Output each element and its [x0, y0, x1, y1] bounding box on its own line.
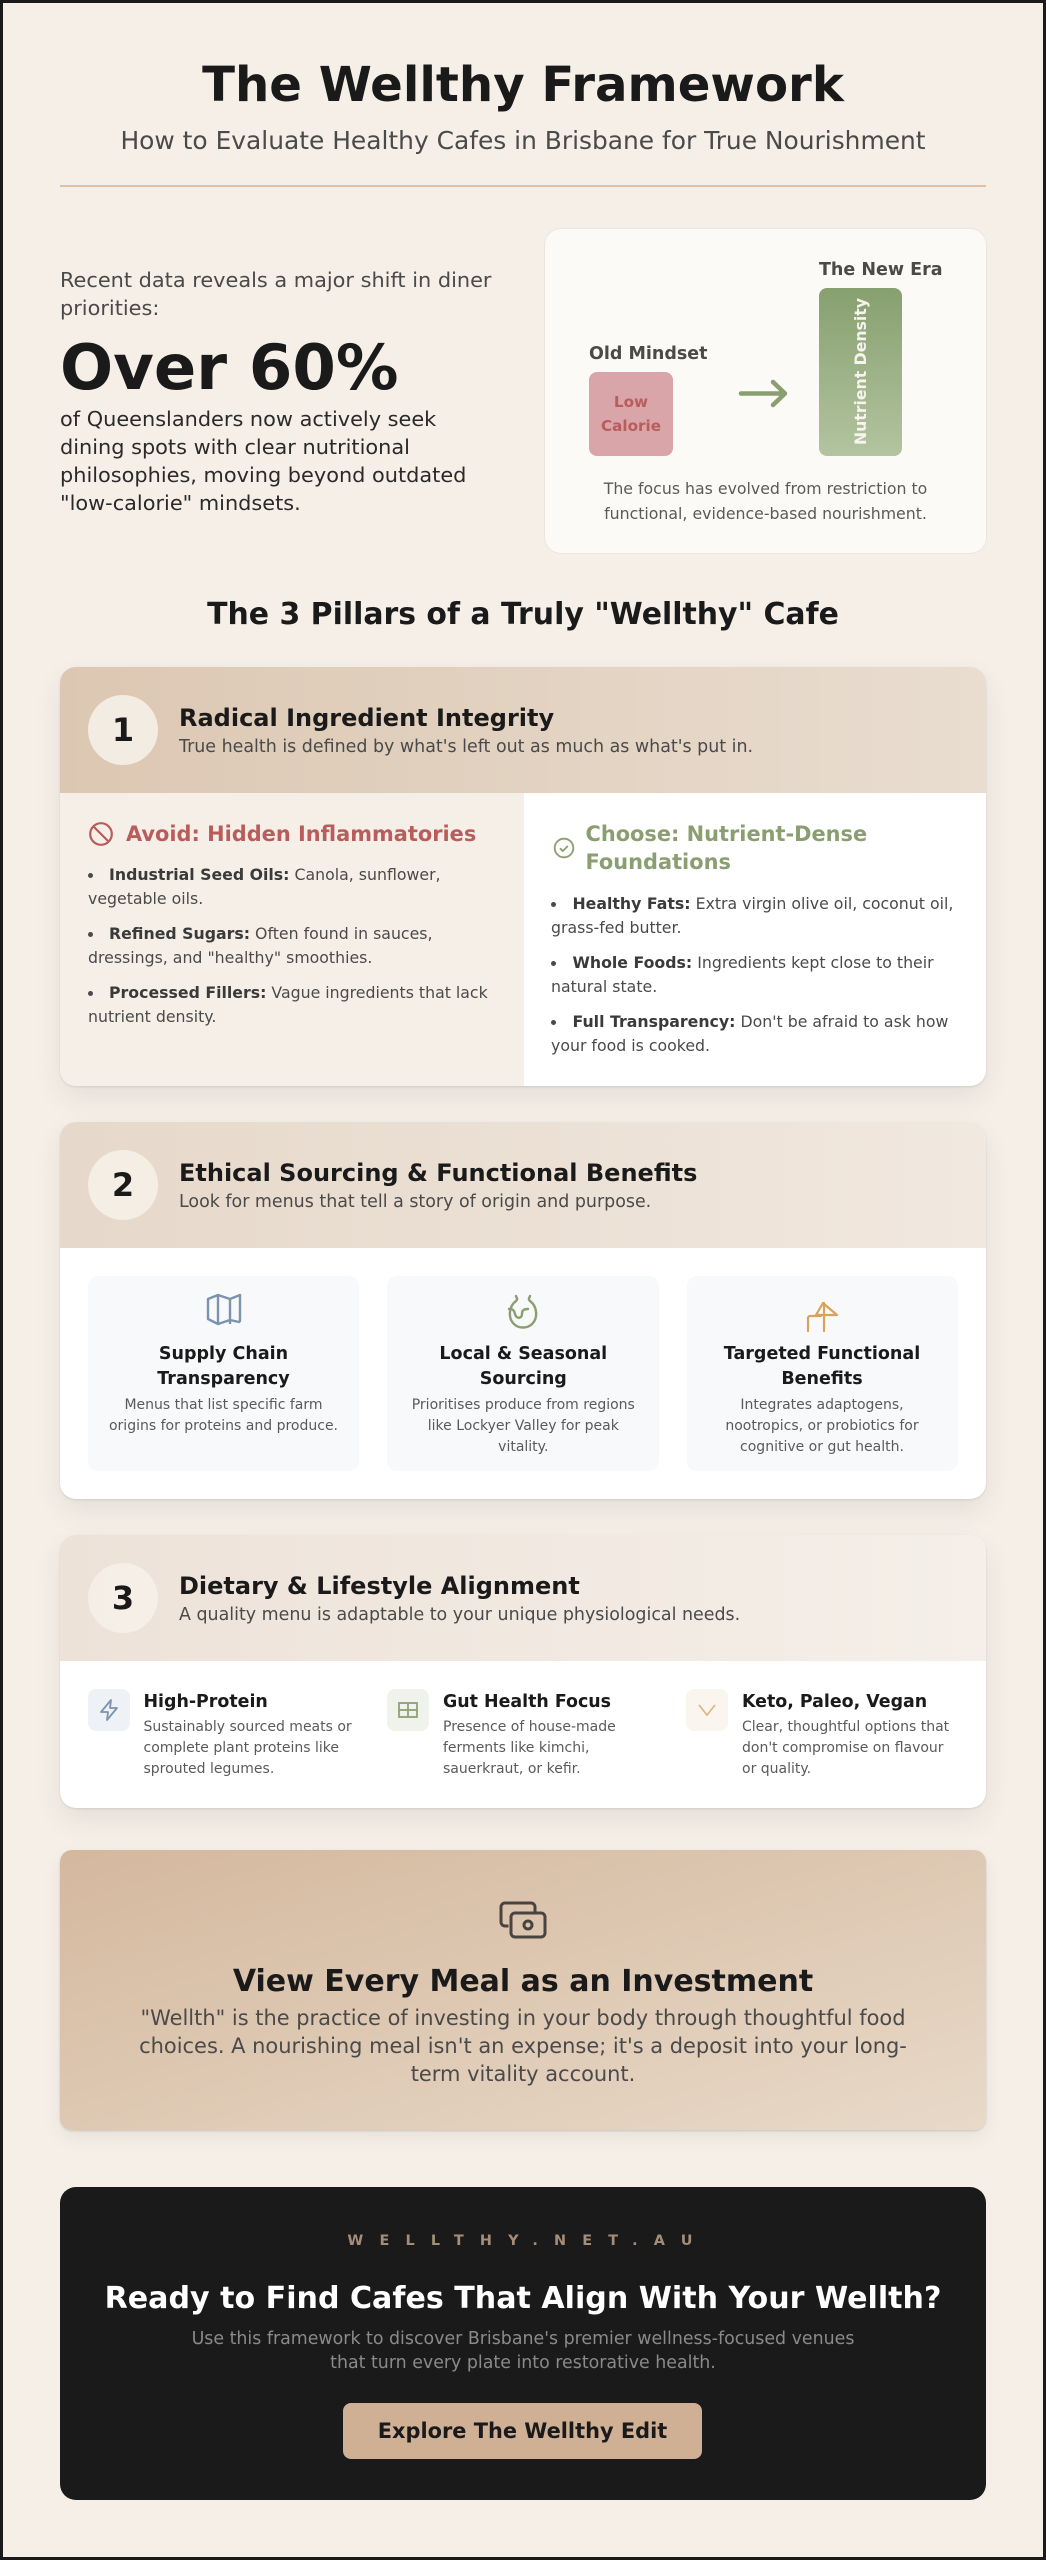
- intro text: recent data: Recent data reveals a major shift in diner: [60, 268, 491, 292]
- bar: low calorie: Calorie: [601, 417, 661, 435]
- pillar 2 header: [60, 1122, 986, 1248]
- pillar 2 title: Ethical Sourcing & Functional Benefits: [179, 1158, 697, 1186]
- keto paleo vegan text: Clear, thoughtful options that: [742, 1719, 949, 1735]
- local seasonal title: Sourcing: [480, 1369, 567, 1389]
- panel: mindset shift chart: [545, 229, 986, 553]
- label: old mindset: Old Mindset: [589, 344, 708, 364]
- keto paleo vegan text: or quality.: [742, 1761, 811, 1777]
- icon: ban: [89, 822, 113, 846]
- icon: bolt: [88, 1689, 130, 1731]
- choose item: fats: Healthy Fats: Extra virgin olive oil, coconut oil,: [572, 894, 953, 912]
- avoid item: sugars: Refined Sugars: Often found in sauces,: [109, 924, 432, 943]
- cta text: [192, 2328, 854, 2373]
- number badge 2: [88, 1150, 158, 1220]
- panel: pillar 2: [60, 1122, 986, 1499]
- intro text: recent data: [60, 268, 492, 320]
- subtitle: How to Evaluate Healthy Cafes in Brisbane for True Nourishment: [120, 126, 926, 155]
- functional benefits title: Benefits: [781, 1369, 863, 1389]
- pillar 1 header: [60, 667, 986, 793]
- local seasonal text: Prioritises produce from regions: [412, 1397, 635, 1413]
- choose heading: Choose: Nutrient-Dense: [586, 822, 867, 846]
- panel: investment callout: [60, 1850, 986, 2130]
- stat description: dining spots with clear nutritional: [60, 435, 410, 459]
- card: local seasonal: [387, 1276, 659, 1471]
- number badge 1: [88, 695, 158, 765]
- gut health title: Gut Health Focus: [443, 1692, 611, 1712]
- gut health text: sauerkraut, or kefir.: [443, 1761, 581, 1777]
- pillar 3 subtitle: A quality menu is adaptable to your unique physiological needs.: [179, 1604, 740, 1624]
- local seasonal title: [439, 1344, 607, 1389]
- panel: call to action: [60, 2187, 986, 2500]
- panel: pillar 1: [60, 667, 986, 1086]
- icon: chevron: [686, 1689, 728, 1731]
- avoid item: fillers: Processed Fillers: Vague ingredients that lack: [109, 983, 488, 1002]
- choose item: fats: grass-fed butter.: [551, 918, 682, 937]
- gut health text: [443, 1719, 616, 1777]
- avoid item: seed oils: [88, 864, 441, 908]
- cta heading: Ready to Find Cafes That Align With Your Wellth?: [105, 2281, 941, 2316]
- avoid item: fillers: [88, 983, 488, 1026]
- avoid item: seed oils: Industrial Seed Oils: Canola, sunflower,: [109, 864, 441, 884]
- stat description: "low-calorie" mindsets.: [60, 491, 301, 515]
- pillar 3 header: [60, 1535, 986, 1661]
- pillar 1 subtitle: True health is defined by what's left out as much as what's put in.: [179, 736, 753, 756]
- pillar 1 title: Radical Ingredient Integrity: [179, 704, 554, 732]
- supply chain text: Menus that list specific farm: [124, 1397, 323, 1413]
- caption: [604, 479, 927, 522]
- button: [343, 2403, 702, 2459]
- card: supply chain: [88, 1276, 359, 1471]
- icon: grid: [387, 1689, 429, 1731]
- bar: low calorie: Low: [614, 393, 648, 411]
- local seasonal text: vitality.: [498, 1439, 548, 1455]
- choose item: transparency: your food is cooked.: [551, 1036, 710, 1055]
- functional benefits text: [725, 1397, 919, 1455]
- icon: check: [554, 838, 574, 858]
- callout text: choices. A nourishing meal isn't an expense; it's a deposit into your long-: [139, 2034, 907, 2058]
- caption: The focus has evolved from restriction to: [604, 479, 927, 498]
- callout text: "Wellth" is the practice of investing in your body through thoughtful food: [140, 2006, 906, 2030]
- stat description: philosophies, moving beyond outdated: [60, 463, 466, 487]
- stat description: of Queenslanders now actively seek: [60, 407, 436, 431]
- section heading: The 3 Pillars of a Truly "Wellthy" Cafe: [207, 596, 839, 632]
- button: Explore The Wellthy Edit: [378, 2419, 667, 2443]
- choose item: whole foods: [551, 952, 934, 996]
- panel: choose column: [551, 822, 953, 1055]
- gut health text: ferments like kimchi,: [443, 1740, 589, 1756]
- icon: map: [206, 1294, 242, 1326]
- supply chain text: [109, 1397, 338, 1434]
- number badge 2: 2: [112, 1166, 134, 1204]
- bar label: Nutrient Density: [851, 299, 870, 445]
- local seasonal title: Local & Seasonal: [439, 1344, 607, 1364]
- avoid item: sugars: dressings, and "healthy" smoothies.: [88, 948, 372, 967]
- callout text: term vitality account.: [411, 2062, 635, 2086]
- functional benefits text: Integrates adaptogens,: [740, 1397, 904, 1413]
- label: the new era: The New Era: [819, 260, 943, 280]
- choose heading: [586, 822, 867, 874]
- keto paleo vegan text: don't compromise on flavour: [742, 1740, 944, 1756]
- functional benefits text: cognitive or gut health.: [740, 1439, 904, 1455]
- choose item: whole foods: natural state.: [551, 977, 657, 996]
- number badge 3: 3: [112, 1579, 134, 1617]
- avoid item: fillers: nutrient density.: [88, 1007, 216, 1026]
- pillar 2 subtitle: Look for menus that tell a story of origin and purpose.: [179, 1192, 651, 1212]
- bar: nutrient density: [819, 288, 902, 456]
- avoid item: sugars: [88, 924, 432, 967]
- functional benefits text: nootropics, or probiotics for: [725, 1418, 919, 1434]
- high-protein text: Sustainably sourced meats or: [144, 1719, 352, 1735]
- panel: pillar 3: [60, 1535, 986, 1808]
- keto paleo vegan title: Keto, Paleo, Vegan: [742, 1692, 927, 1712]
- icon: sprout circle: [508, 1294, 538, 1329]
- pillar 3 title: Dietary & Lifestyle Alignment: [179, 1572, 580, 1600]
- supply chain title: Transparency: [157, 1369, 290, 1389]
- brand text: WELLTHY.NET.AU: [347, 2233, 709, 2249]
- functional benefits title: Targeted Functional: [724, 1344, 920, 1364]
- bar: low calorie: [589, 372, 673, 456]
- big stat: Over 60%: [60, 331, 398, 404]
- panel: avoid column: [60, 793, 524, 1086]
- high-protein text: sprouted legumes.: [144, 1761, 274, 1777]
- stat description: [60, 407, 466, 515]
- caption: functional, evidence-based nourishment.: [604, 504, 927, 522]
- cta text: Use this framework to discover Brisbane's premier wellness-focused venues: [192, 2328, 854, 2348]
- intro text: recent data: priorities:: [60, 296, 159, 320]
- high-protein text: [144, 1719, 352, 1777]
- choose item: transparency: Full Transparency: Don't be afraid to ask how: [572, 1012, 948, 1030]
- title: The Wellthy Framework: [202, 57, 844, 113]
- icon: functional: [806, 1302, 838, 1332]
- avoid heading: Avoid: Hidden Inflammatories: [126, 822, 476, 846]
- local seasonal text: [412, 1397, 635, 1455]
- high-protein text: complete plant proteins like: [144, 1740, 339, 1756]
- callout text: [139, 2006, 907, 2086]
- choose item: transparency: [551, 1012, 948, 1055]
- card: functional benefits: [686, 1276, 958, 1471]
- high-protein title: High-Protein: [144, 1692, 268, 1712]
- supply chain text: origins for proteins and produce.: [109, 1418, 338, 1434]
- functional benefits title: [724, 1344, 920, 1389]
- gut health text: Presence of house-made: [443, 1719, 616, 1735]
- local seasonal text: like Lockyer Valley for peak: [428, 1418, 619, 1434]
- icon: banknotes: [500, 1902, 546, 1938]
- arrow: [738, 380, 788, 408]
- choose item: whole foods: Whole Foods: Ingredients kept close to their: [572, 952, 934, 972]
- number badge 1: 1: [112, 711, 134, 749]
- choose heading: Foundations: [586, 850, 731, 874]
- number badge 3: [88, 1563, 158, 1633]
- supply chain title: Supply Chain: [159, 1344, 288, 1364]
- supply chain title: [157, 1344, 290, 1389]
- choose item: fats: [551, 894, 953, 937]
- callout heading: View Every Meal as an Investment: [233, 1964, 813, 1998]
- keto paleo vegan text: [742, 1719, 949, 1777]
- avoid item: seed oils: vegetable oils.: [88, 889, 203, 908]
- cta text: that turn every plate into restorative health.: [330, 2353, 716, 2373]
